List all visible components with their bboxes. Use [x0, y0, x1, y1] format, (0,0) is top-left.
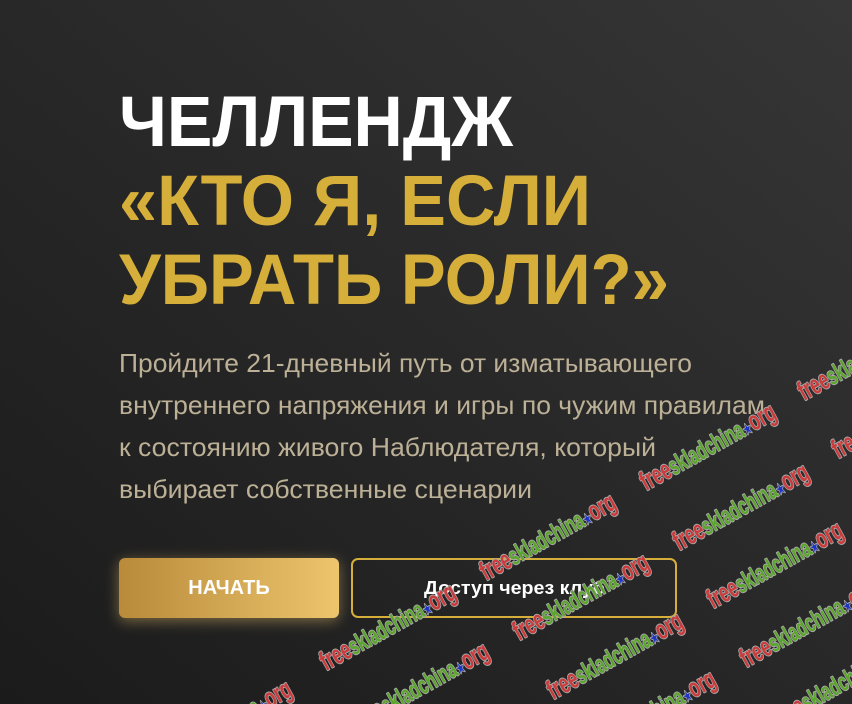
- button: start: [119, 558, 339, 621]
- button: start: НАЧАТЬ: [188, 577, 270, 599]
- description text: Пройдите 21-дневный путь от изматывающего: [119, 348, 692, 378]
- watermark 6: freeskladchina★org: [507, 547, 654, 646]
- description text: выбирает собственные сценарии: [119, 474, 532, 504]
- button: club access: [352, 559, 676, 617]
- watermark 1: freeskladchina★org: [634, 397, 781, 496]
- title: УБРАТЬ РОЛИ?»: [119, 241, 669, 320]
- button: club access: Доступ через клуб: [424, 577, 605, 598]
- description text: внутреннего напряжения и игры по чужим правилам: [119, 390, 765, 420]
- watermark 7: freeskladchina★org: [541, 606, 688, 704]
- title: «КТО Я, ЕСЛИ: [119, 162, 591, 241]
- title: ЧЕЛЛЕНДЖ: [119, 83, 514, 162]
- watermark 2: freeskladchina★org: [667, 457, 814, 556]
- watermark 10: freeskladchina★org: [314, 577, 461, 676]
- title: [119, 83, 669, 320]
- watermarks: [150, 307, 852, 704]
- description text: к состоянию живого Наблюдателя, который: [119, 432, 656, 462]
- watermark 5: freeskladchina★org: [474, 487, 621, 586]
- description text: [119, 348, 765, 504]
